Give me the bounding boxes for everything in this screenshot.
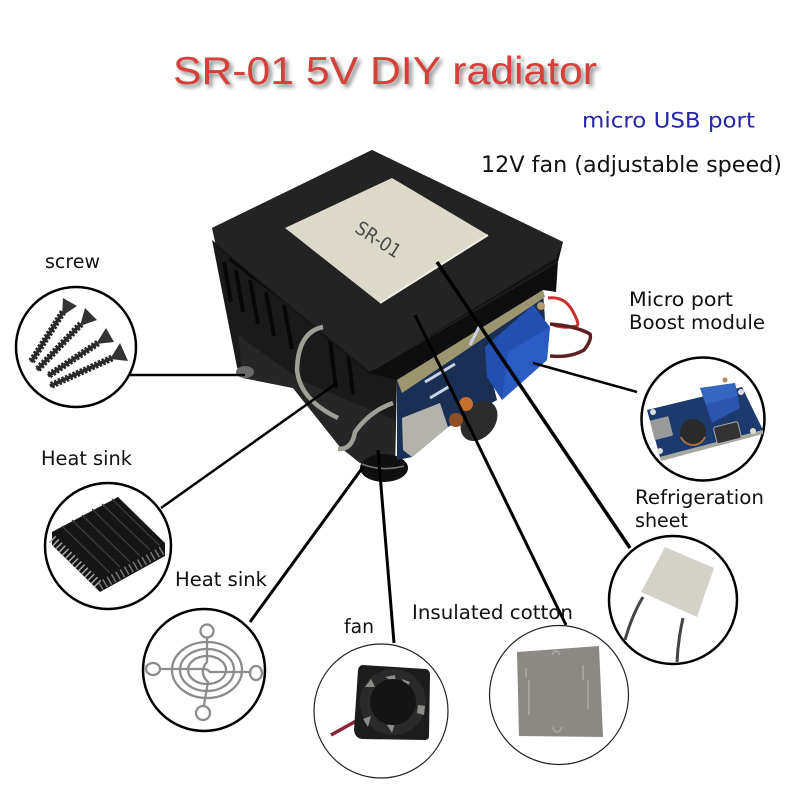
main device photo — [212, 150, 590, 482]
boost circuit board — [397, 290, 545, 460]
icon: screws — [31, 298, 128, 386]
leader lines — [130, 262, 637, 643]
circle — [45, 483, 171, 609]
circle — [16, 287, 136, 407]
icon: small fan — [331, 665, 430, 740]
label: Insulated cotton — [412, 601, 573, 624]
device body and fins — [212, 240, 397, 470]
circle — [490, 626, 628, 764]
callout: boost module — [629, 288, 765, 480]
screw head on device — [236, 366, 254, 378]
label: Refrigeration — [635, 486, 764, 509]
callout: fan — [314, 615, 448, 778]
title: SR-01 5V DIY radiator — [173, 50, 597, 93]
body under foam, right side — [368, 262, 558, 380]
circle — [314, 644, 448, 778]
callout: screw — [16, 250, 136, 407]
label: 12V fan: 12V fan (adjustable speed) — [481, 153, 782, 178]
micro USB connector — [402, 403, 448, 457]
plate marking: SR-01 — [351, 217, 405, 263]
callout: refrigeration sheet — [609, 486, 764, 664]
icon: wire guard — [146, 624, 262, 720]
circle — [143, 609, 265, 731]
red and black wires — [548, 298, 590, 356]
label: Heat sink — [175, 568, 268, 591]
icon: finned heat sink — [52, 497, 165, 592]
callout: fan guard — [143, 568, 268, 731]
inductor — [449, 394, 505, 448]
label: screw — [45, 250, 100, 273]
ceramic plate — [285, 178, 488, 303]
fan foot under device — [360, 454, 408, 482]
label: Micro port — [629, 288, 733, 311]
label: Heat sink — [41, 447, 133, 470]
label line two: Boost module — [629, 311, 765, 334]
icon: boost board — [647, 378, 763, 461]
insulating foam block — [212, 150, 563, 373]
label: fan — [344, 615, 374, 638]
icon: grey cotton pad — [517, 646, 603, 737]
callout: heat sink — [41, 447, 171, 609]
grey lead wires — [297, 327, 393, 449]
blue potentiometer — [485, 302, 550, 400]
circle — [642, 358, 764, 480]
label line two: sheet — [635, 509, 688, 532]
label: micro USB port: micro USB port — [582, 108, 755, 132]
callout: insulated cotton — [412, 601, 628, 764]
icon: peltier plate — [625, 547, 714, 662]
circle — [609, 536, 737, 664]
